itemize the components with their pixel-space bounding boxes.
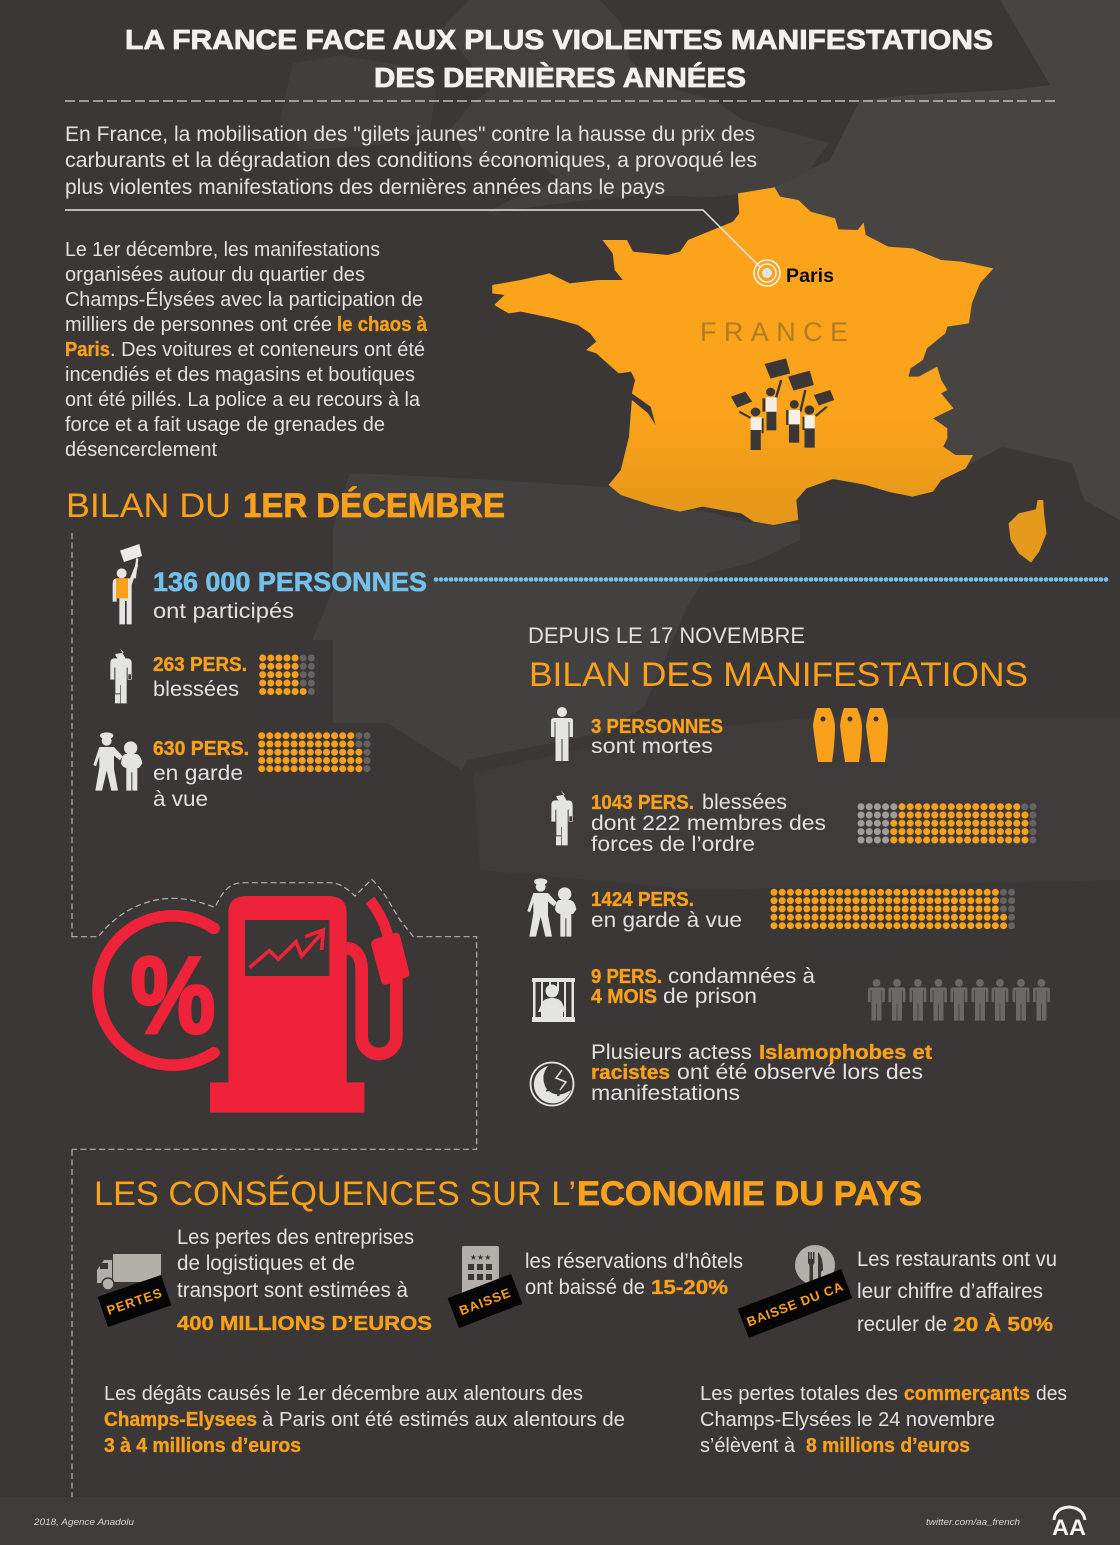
stat: 263 blessées: 263 PERS. <box>153 654 247 676</box>
stat: 136 000 personnes <box>153 567 427 623</box>
intro text: plus violentes manifestations des dernières années dans le pays <box>65 176 665 199</box>
text block: 1er décembre: force et a fait usage de grenades de <box>65 414 385 436</box>
title <box>125 24 993 93</box>
callout line to Paris <box>65 210 760 267</box>
dot chart: 630 <box>262 736 368 769</box>
intro text <box>65 123 757 199</box>
text block: dégâts <box>104 1383 625 1457</box>
stat: 3 morts: 3 PERSONNES <box>591 716 723 738</box>
footer handle: twitter.com/aa_french <box>926 1517 1020 1528</box>
icon: police and detainee <box>93 732 142 791</box>
stat: 630 garde à vue: 630 PERS. <box>153 738 249 760</box>
text block: commerçants: des <box>1036 1383 1067 1405</box>
text block: logistique: 400 MILLIONS D’EUROS <box>177 1313 432 1335</box>
text block: dégâts: à Paris ont été estimés aux alentours de <box>262 1409 625 1431</box>
icon: prison <box>532 978 575 1022</box>
icon: broken crescent <box>530 1062 574 1106</box>
heading: depuis le 17 novembre: BILAN DES MANIFESTATIONS <box>529 656 1028 694</box>
text block: restaurants: reculer de <box>857 1313 947 1336</box>
stat: 9 condamnées: 9 PERS. <box>591 966 662 988</box>
stat: 136 000 personnes: 136 000 PERSONNES <box>153 567 427 597</box>
text block: restaurants: 20 À 50% <box>953 1313 1053 1336</box>
stat: 1424 garde à vue: 1424 PERS. <box>591 889 694 911</box>
icon: protester <box>113 544 142 624</box>
dashed frame <box>72 533 477 1497</box>
icon: Paris marker <box>754 260 780 286</box>
heading: conséquences <box>94 1175 922 1213</box>
text block: 1er décembre: désencerclement <box>65 439 217 461</box>
text block: restaurants: Les restaurants ont vu <box>857 1248 1057 1271</box>
icon row: nine figures <box>868 979 1050 1021</box>
text block: hôtels <box>525 1250 743 1299</box>
stat: 3 morts: sont mortes <box>591 735 713 758</box>
text block: logistique: transport sont estimées à <box>177 1279 408 1302</box>
heading: depuis le 17 novembre: DEPUIS LE 17 NOVEMBRE <box>528 623 805 648</box>
stat: 1043 blessées <box>591 791 826 856</box>
title: DES DERNIÈRES ANNÉES <box>374 62 746 93</box>
label: Paris: Paris <box>786 266 834 287</box>
stat: 630 garde à vue: à vue <box>153 788 208 811</box>
stat: 1424 garde à vue: en garde à vue <box>591 909 742 932</box>
label: France: FRANCE <box>700 317 848 347</box>
text block: hôtels: 15-20% <box>651 1277 728 1299</box>
icon: fuel pump and percent <box>98 896 409 1113</box>
stat: 1043 blessées: blessées <box>702 791 787 814</box>
text block: commerçants <box>700 1383 1067 1457</box>
heading: bilan du 1er décembre: 1ER DÉCEMBRE <box>243 487 505 525</box>
icon: coffins <box>813 708 888 762</box>
stat: 1043 blessées: dont 222 membres des <box>591 812 826 835</box>
text block: 1er décembre <box>65 239 428 461</box>
text block: actes racistes: Plusieurs actess <box>591 1041 752 1064</box>
dot chart: 1424 <box>774 892 1012 926</box>
stat: 630 garde à vue <box>153 738 249 811</box>
icon: fuel pump and percent: % <box>131 935 215 1056</box>
logo: AA: AA <box>1052 1515 1086 1540</box>
heading: depuis le 17 novembre <box>528 623 1028 694</box>
text block: 1er décembre: ont été pillés. La police a eu recours à la <box>65 389 421 411</box>
text block: logistique: de logistiques et de <box>177 1252 355 1275</box>
stat: 1424 garde à vue <box>591 889 742 932</box>
footer credit: 2018, Agence Anadolu <box>33 1517 135 1528</box>
icon: hotel with tag: ★★★ <box>470 1253 491 1262</box>
dot chart: 263 <box>263 658 312 692</box>
stat: 263 blessées: blessées <box>153 678 239 701</box>
text block: restaurants <box>857 1248 1057 1336</box>
heading: conséquences: ECONOMIE DU PAYS <box>577 1175 922 1213</box>
intro text: En France, la mobilisation des "gilets jaunes" contre la hausse du prix des <box>65 123 755 146</box>
text block: 1er décembre: Le 1er décembre, les manifestations <box>65 239 380 261</box>
heading: bilan du 1er décembre: BILAN DU <box>66 487 231 525</box>
stat: 1043 blessées: 1043 PERS. <box>591 792 694 814</box>
icon: truck with tag: PERTES <box>105 1285 165 1318</box>
icon: hotel with tag <box>448 1246 522 1328</box>
icon: restaurant with tag <box>738 1245 852 1338</box>
stat: 9 condamnées <box>591 965 815 1008</box>
text block: 1er décembre: Champs-Élysées avec la participation de <box>65 288 423 311</box>
text block: hôtels: les réservations d’hôtels <box>525 1250 743 1273</box>
text block: 1er décembre: organisées autour du quartier des <box>65 264 365 286</box>
stat: 1043 blessées: forces de l’ordre <box>591 833 755 856</box>
stat: 9 condamnées: de prison <box>663 985 757 1008</box>
stat: 9 condamnées: condamnées à <box>668 965 815 988</box>
icon: person <box>551 707 573 761</box>
protesters on the map <box>731 358 834 450</box>
text block: 1er décembre: milliers de personnes ont crée <box>65 314 332 336</box>
text block: 1er décembre: incendiés et des magasins et boutiques <box>65 364 415 386</box>
map: France <box>492 187 1047 563</box>
stat: 136 000 personnes: ont participés <box>153 600 294 623</box>
text block: commerçants: Champs-Elysées le 24 novembre <box>700 1409 995 1431</box>
text block: 1er décembre: . Des voitures et conteneurs ont été <box>110 339 425 361</box>
text block: dégâts: Les dégâts causés le 1er décembre aux alentours des <box>104 1383 583 1405</box>
text block: commerçants: commerçants <box>904 1383 1030 1405</box>
title: LA FRANCE FACE AUX PLUS VIOLENTES MANIFESTATIONS <box>125 24 993 55</box>
text block: actes racistes: ont été observé lors des <box>677 1061 923 1084</box>
text block: 1er décembre: Paris <box>65 339 110 361</box>
icon: hotel with tag: BAISSE <box>457 1285 513 1318</box>
text block: commerçants: Les pertes totales des <box>700 1383 898 1405</box>
icon: police and detainee <box>527 878 576 937</box>
text block: dégâts: Champs-Elysees <box>104 1409 257 1431</box>
icon: restaurant with tag: BAISSE DU CA <box>745 1279 846 1329</box>
dotted divider <box>436 577 1110 582</box>
heading: conséquences: LES CONSÉQUENCES SUR L’ <box>94 1175 576 1213</box>
text block: commerçants: s’élèvent à <box>700 1435 796 1457</box>
text block: actes racistes: Islamophobes et <box>759 1042 932 1064</box>
stat: 3 morts <box>591 716 723 758</box>
icon: truck with tag <box>97 1254 171 1327</box>
text block: actes racistes: racistes <box>591 1062 670 1084</box>
intro text: carburants et la dégradation des conditions économiques, a provoqué les <box>65 149 757 172</box>
text block: commerçants: 8 millions d’euros <box>806 1435 970 1457</box>
stat: 630 garde à vue: en garde <box>153 762 243 785</box>
icon: wounded <box>110 649 132 703</box>
text block: actes racistes <box>591 1041 932 1105</box>
heading: bilan du 1er décembre <box>66 487 505 525</box>
map: Corsica <box>1009 500 1047 563</box>
text block: restaurants: leur chiffre d’affaires <box>857 1280 1043 1303</box>
icon: wounded <box>551 791 573 845</box>
text block: dégâts: 3 à 4 millions d’euros <box>104 1435 301 1457</box>
stat: 263 blessées <box>153 654 247 701</box>
text block: logistique <box>177 1226 432 1335</box>
text block: hôtels: ont baissé de <box>525 1276 645 1299</box>
text block: actes racistes: manifestations <box>591 1082 740 1105</box>
text block: logistique: Les pertes des entreprises <box>177 1226 414 1249</box>
text block: 1er décembre: le chaos à <box>337 314 428 336</box>
dot chart: 1043 <box>861 807 1034 840</box>
stat: 9 condamnées: 4 MOIS <box>591 986 657 1008</box>
